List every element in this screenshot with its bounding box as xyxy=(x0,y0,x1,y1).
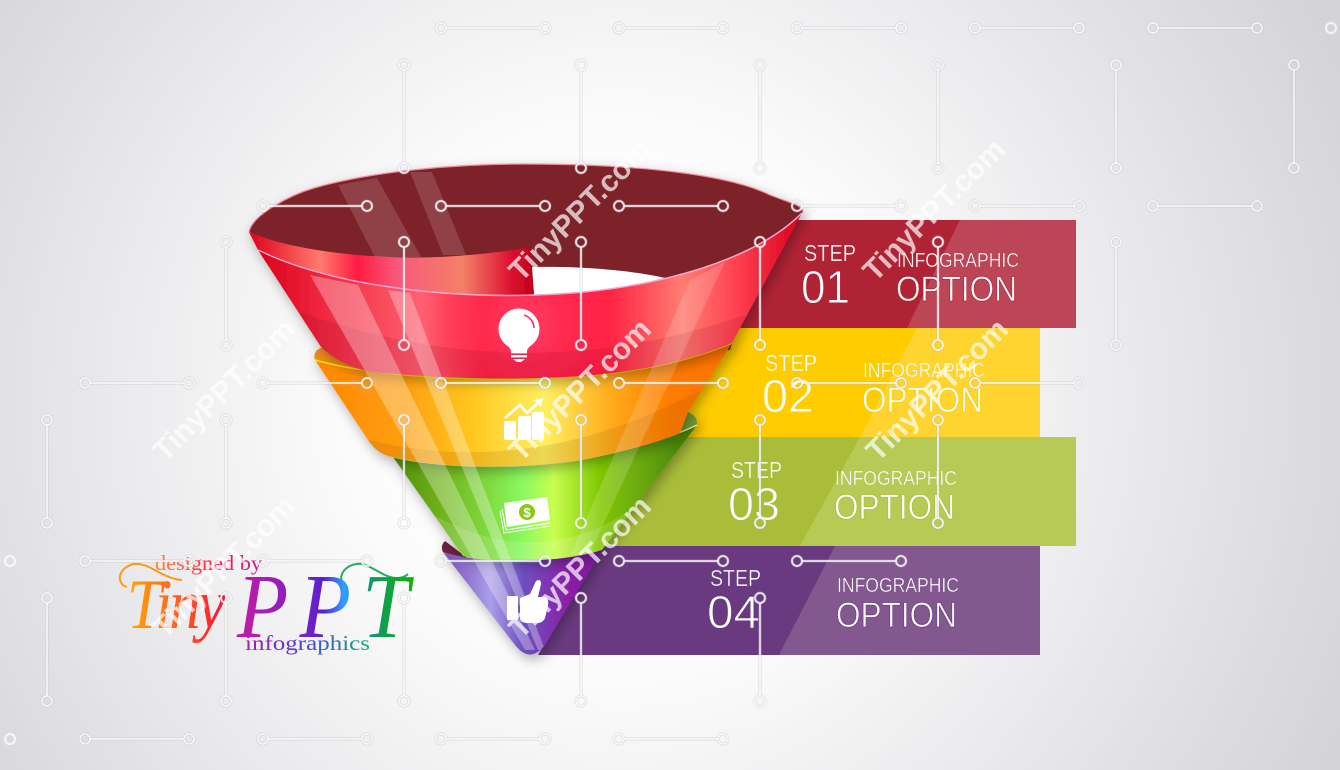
logo word: PPT: PPT xyxy=(236,556,414,657)
funnel segment: red xyxy=(249,164,803,400)
icon: light bulb xyxy=(498,308,540,362)
step 4 text xyxy=(707,565,959,638)
step 3 text: 03 xyxy=(728,478,780,530)
step 3 text: STEP xyxy=(731,457,782,483)
panel: step 1 bar xyxy=(730,220,1076,328)
step 1 text: OPTION xyxy=(896,270,1017,309)
step 2 text: INFOGRAPHIC xyxy=(863,360,985,382)
watermarks: TinyPPT.com xyxy=(860,313,1015,468)
icon: thumbs up xyxy=(507,580,548,623)
watermarks: TinyPPT.com xyxy=(503,133,658,288)
funnel mouth: see-through opening xyxy=(532,267,665,295)
funnel segment: orange xyxy=(314,336,734,480)
icon: banknotes xyxy=(500,497,550,533)
logo line: infographics: infographics xyxy=(245,631,370,655)
step 1 text: 01 xyxy=(801,261,850,313)
funnel mouth: dark interior xyxy=(249,164,803,295)
step 4 text: OPTION xyxy=(836,596,957,635)
icon: banknotes: $ xyxy=(523,505,531,520)
step 1 text: STEP xyxy=(804,240,856,266)
step 4 text: INFOGRAPHIC xyxy=(837,575,959,597)
watermarks: TinyPPT.com xyxy=(147,313,302,468)
funnel segment: purple xyxy=(442,541,602,654)
logo word: Tiny: Tiny xyxy=(127,565,225,644)
funnel mouth: inner back wall xyxy=(249,232,534,295)
step 1 text xyxy=(801,240,1019,313)
watermarks: TinyPPT.com xyxy=(857,133,1012,288)
step 1 text: INFOGRAPHIC xyxy=(897,250,1019,272)
panel: step 2 bar xyxy=(680,328,1040,437)
step 2 text xyxy=(762,350,985,422)
step 2 text: OPTION xyxy=(862,381,983,420)
step 2 text: STEP xyxy=(765,350,817,376)
step 2 text: 02 xyxy=(762,370,814,422)
panel: step 4 bar xyxy=(538,546,1040,655)
light streaks across funnel xyxy=(310,172,725,650)
icon: growth chart xyxy=(504,398,544,440)
step 3 text: INFOGRAPHIC xyxy=(835,468,957,490)
watermarks: TinyPPT.com xyxy=(503,490,658,645)
step 4 text: 04 xyxy=(707,586,760,638)
step 3 text: OPTION xyxy=(834,488,955,527)
panel: step 3 bar xyxy=(600,437,1076,546)
funnel segment: green xyxy=(393,412,697,570)
logo: designed by TinyPPT infographics xyxy=(120,551,414,657)
step 4 text: STEP xyxy=(710,565,761,591)
step 3 text xyxy=(728,457,957,530)
watermarks: TinyPPT.com xyxy=(503,313,658,468)
watermarks xyxy=(147,133,1015,645)
logo line: designed by: designed by xyxy=(155,551,263,575)
funnel xyxy=(249,164,803,654)
watermarks: TinyPPT.com xyxy=(147,490,302,645)
